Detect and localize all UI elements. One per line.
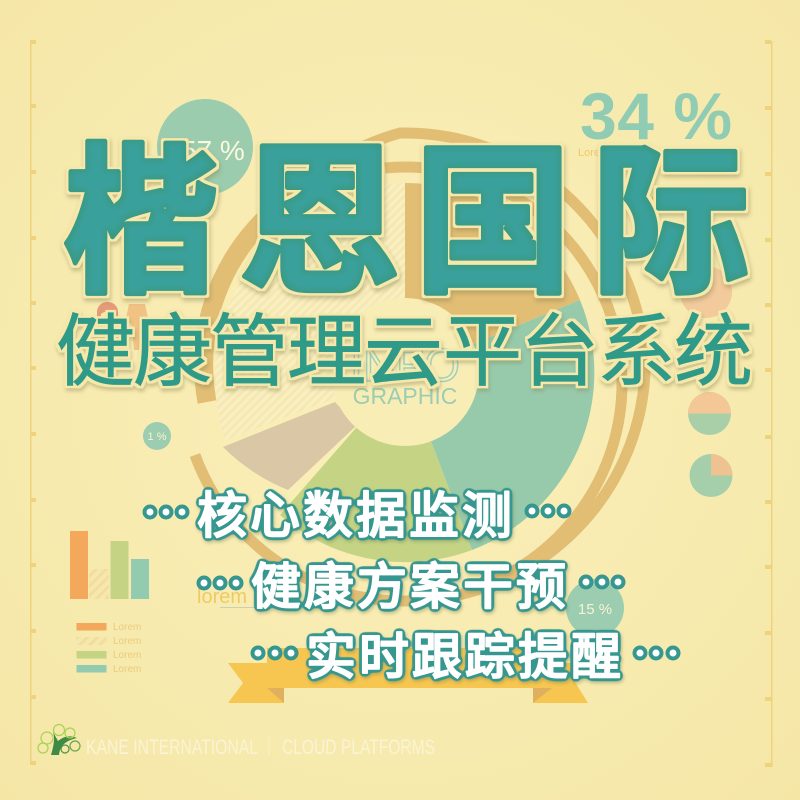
circle stat: 1 % [143, 422, 171, 450]
hatched sector [215, 183, 405, 440]
feature line 1: 核心数据监测: 核心数据监测 [197, 476, 512, 548]
bar chart legend [76, 622, 141, 675]
bar chart legend: Lorem [113, 664, 141, 675]
tan sector [223, 402, 357, 490]
frame: left ruler [30, 40, 36, 765]
big stat: 34 %: Lorem ipsum dolor sit amet [578, 147, 711, 159]
circle stat: 1 %: 1 % [148, 431, 167, 443]
title: 楷恩国际 [63, 132, 750, 314]
half pie icon [688, 392, 731, 435]
bar chart legend: Lorem [113, 636, 141, 647]
circle stat: 15 %: 15 % [578, 601, 612, 618]
bar chart legend: Lorem [113, 650, 141, 661]
green sector [280, 372, 472, 562]
bar chart legend: Lorem [113, 622, 141, 633]
outer spiral ring [195, 133, 645, 601]
title: 楷恩国际: 恩 [240, 133, 400, 314]
circle stat: 57 % [157, 99, 253, 195]
quarter pie icon [690, 454, 732, 497]
donut label: INFO [350, 339, 460, 391]
feature line 2: 健康方案干预: 健康方案干预 [251, 547, 566, 619]
title: 楷恩国际: 际 [592, 133, 750, 314]
title: 楷恩国际: 国 [414, 133, 572, 314]
gold sector [405, 183, 580, 372]
logo text: CLOUD PLATFORMS [282, 736, 435, 759]
donut label: GRAPHIC [353, 383, 457, 409]
small label: lorem right [640, 191, 700, 211]
logo: tree icon [38, 724, 80, 755]
person icons [97, 302, 148, 350]
feature line 3: 实时跟踪提醒: 实时跟踪提醒 [306, 617, 621, 689]
bar chart [70, 531, 149, 599]
logo text [86, 736, 435, 759]
teal sector [405, 300, 594, 550]
ribbon banner [228, 648, 594, 703]
frame: right ruler [765, 40, 772, 767]
donut chart [195, 133, 645, 601]
circle stat: 57 %: 57 % [181, 135, 245, 166]
subtitle: 健康管理云平台系统: 健康管理云平台系统 [56, 287, 753, 402]
title: 楷恩国际: 楷 [63, 132, 219, 314]
small label: lorem left: lorem [197, 586, 247, 608]
logo text: KANE INTERNATIONAL [86, 736, 258, 759]
circle stat: 15 % [566, 579, 624, 637]
peach circle upper right [680, 266, 732, 318]
big stat: 34 %: 34 % [580, 79, 732, 153]
donut hole [331, 298, 479, 446]
small label: lorem right: lorem [640, 191, 675, 207]
